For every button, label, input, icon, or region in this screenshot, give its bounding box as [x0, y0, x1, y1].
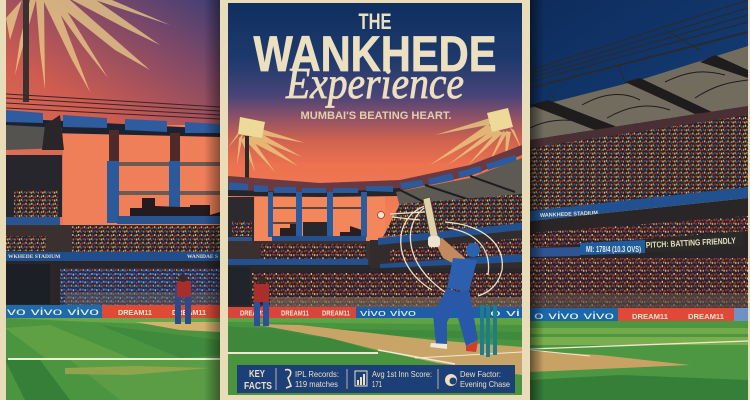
right scoreboard: [580, 232, 743, 255]
centre scoreboard and skyline: [280, 222, 362, 237]
right advertising boards: [530, 308, 748, 322]
centre roof: [228, 145, 522, 207]
left skyline silhouette: [130, 198, 220, 218]
title: MUMBAI'S BEATING HEART.: [300, 110, 452, 122]
panel: centre poster: [228, 3, 522, 395]
left advertising boards: vo vivo vivo: [7, 307, 100, 318]
left advertising boards: [5, 305, 220, 318]
left stadium banner: [5, 252, 220, 261]
centre advertising boards: DREAM11: [322, 310, 350, 318]
icon: dew drop: [445, 374, 457, 386]
right advertising boards: DREAM11: [688, 312, 724, 321]
right canopy: [530, 46, 748, 140]
centre field: [228, 318, 522, 395]
left upper stand: [6, 155, 220, 253]
left columns: [107, 161, 220, 223]
right field: [530, 321, 748, 400]
fact: average first innings score: [372, 371, 432, 387]
left fielder: [175, 274, 191, 324]
left roof structure: [5, 94, 220, 163]
centre advertising boards: [228, 307, 522, 318]
right stadium banner: WANKHEDE STADIUM: [540, 210, 598, 219]
motion swirls: [390, 205, 502, 296]
key facts heading: FACTS: [244, 380, 272, 392]
centre columns: [268, 192, 367, 241]
key facts heading: KEY: [249, 368, 265, 380]
centre advertising boards: o vi: [490, 308, 520, 318]
centre advertising boards: DREAM11: [240, 310, 268, 318]
left advertising boards: DREAM11: [118, 308, 152, 317]
title: Experience: [285, 59, 464, 108]
centre left stand: [228, 197, 370, 265]
left lower stand: [6, 261, 220, 306]
fact: dew factor: Dew Factor:: [460, 370, 501, 379]
icon: bar chart: [355, 371, 367, 386]
title: THE: [358, 9, 392, 34]
fact: IPL records: IPL Records:: [295, 370, 339, 379]
fact: average first innings score: 171: [372, 380, 382, 389]
left floodlight pole: [23, 0, 29, 102]
title: WANKHEDE: [254, 26, 496, 82]
left stadium banner: WKHEDE STADIUM: [8, 254, 61, 260]
right advertising boards: o vivo vivo: [534, 311, 615, 322]
centre sky gap: [255, 196, 385, 218]
right upper crowd: [530, 106, 748, 212]
fact: IPL records: [296, 371, 338, 387]
left stadium banner: WANIDAE S: [187, 254, 218, 260]
icon: left floodlight: [228, 117, 304, 178]
key facts heading: [244, 370, 272, 389]
right scoreboard: MI: 178/4 (10.3 OVS): [586, 245, 641, 254]
left blue rail: [117, 216, 220, 224]
right panel edge shade: [530, 0, 544, 400]
wicketkeeper fielder: [254, 276, 269, 326]
centre right stands: [370, 194, 522, 268]
right roof trusses: [530, 0, 748, 110]
fact: average first innings score: Avg 1st Inn Score:: [372, 370, 432, 379]
right stadium banner: [530, 187, 748, 221]
batsman: [423, 197, 480, 352]
centre advertising boards: DREAM11: [281, 310, 309, 318]
icon: bat and ball: [285, 370, 291, 388]
icon: left floodlight rays: [6, 0, 170, 92]
cricket ball: [378, 212, 384, 218]
divider lines: [276, 368, 438, 390]
left advertising boards: DREAM11: [172, 308, 206, 317]
title: [254, 9, 496, 122]
icon: right floodlight: [430, 108, 522, 165]
panel: left stadium view: [5, 0, 220, 400]
centre advertising boards: vivo vivo: [360, 308, 416, 318]
right middle crowd: [530, 198, 748, 260]
fact: IPL records: 119 matches: [295, 380, 338, 389]
panel: right stadium view: [530, 0, 748, 400]
left panel edge shade: [204, 0, 220, 400]
centre lower stand: [228, 265, 522, 307]
left sunset gap: [63, 125, 220, 225]
left field: [5, 318, 220, 400]
stumps: [480, 305, 497, 357]
key facts panel: [237, 365, 515, 393]
fact: dew factor: [460, 370, 510, 389]
right lower crowd: [530, 258, 748, 308]
right advertising boards: DREAM11: [632, 312, 668, 321]
fact: dew factor: Evening Chase: [460, 380, 510, 389]
